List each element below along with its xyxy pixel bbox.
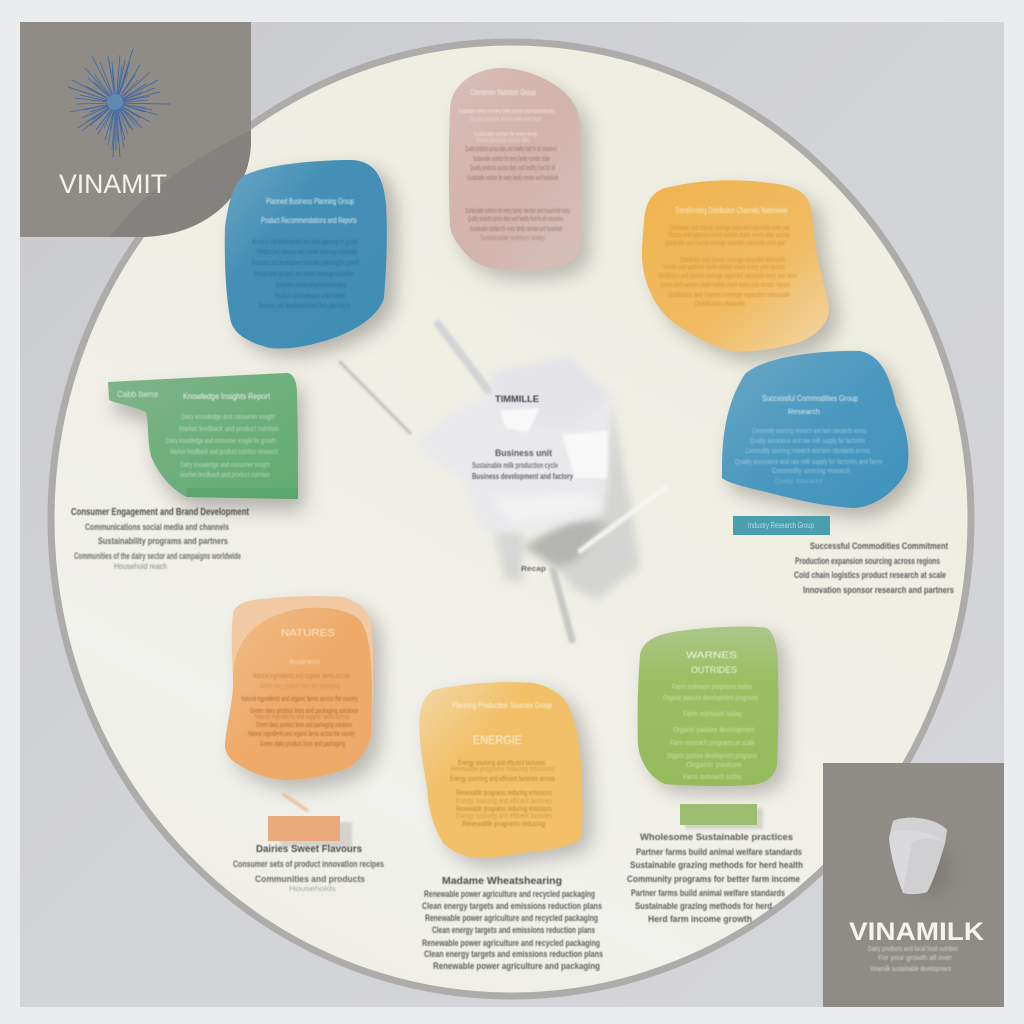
orange card text: Green dairy product lines and packaging solutions bbox=[250, 708, 358, 715]
tag: lime label bbox=[680, 804, 763, 829]
panel: upper-left blue card bbox=[225, 160, 397, 356]
text block: bottom caption: Clean energy targets and emissions reduction plans bbox=[424, 949, 603, 960]
brand subtext: Vinamilk sustainable development bbox=[870, 964, 952, 973]
right blue card text: Commodity sourcing research and farm standards across bbox=[752, 428, 867, 435]
lime card text: Farm outreach today bbox=[683, 711, 742, 718]
amber card text: Stores and partners build market share every year across regions bbox=[660, 282, 790, 289]
blue card text: Business unit development and dairy planning for growth bbox=[252, 239, 358, 246]
text block: bottom caption bbox=[422, 875, 603, 972]
centre: white crumpled milk carton bbox=[340, 324, 665, 640]
pink card text: Sustainable nutrition for every family member today bbox=[473, 156, 550, 163]
text block: lower-left caption: Dairies Sweet Flavours bbox=[256, 844, 362, 855]
text block: bottom caption: Clean energy targets and emissions reduction plans bbox=[432, 925, 595, 936]
tag: orange label with pointer bbox=[268, 794, 352, 847]
yellow card text bbox=[450, 700, 555, 828]
pink card text: Cinnamon Nutrition Group bbox=[470, 87, 536, 97]
text block: bottom caption: Madame Wheatshearing bbox=[442, 875, 562, 887]
blue card text: Business unit development and dairy planning for growth bbox=[252, 260, 359, 267]
amber card text: Stores and partners build market share every year across bbox=[663, 264, 785, 271]
text block: lower-left caption: Households bbox=[289, 886, 337, 893]
text block: right caption: Cold chain logistics product research at scale bbox=[794, 570, 946, 581]
orange card text bbox=[241, 628, 358, 748]
top-left brand panel bbox=[20, 22, 251, 237]
lime card text bbox=[663, 650, 758, 781]
text block: bottom caption: Renewable power agriculture and recycled packaging bbox=[425, 913, 598, 924]
right blue card text: Commodity sourcing research and farm standards across bbox=[745, 448, 870, 455]
brand name VINAMIT: VINAMIT bbox=[59, 169, 167, 199]
text block: lower-right caption: Partner farms build animal welfare standards bbox=[631, 888, 785, 899]
text block: left caption: Consumer Engagement and Brand Development bbox=[71, 506, 249, 518]
blue card text: Product and category and market bbox=[275, 293, 345, 300]
yellow card text: Energy sourcing and efficient factories bbox=[456, 813, 552, 820]
green card text bbox=[117, 389, 279, 479]
centre text bbox=[472, 394, 573, 573]
panel: left green card bbox=[108, 373, 304, 511]
orange card text: Green dairy product lines and packaging solutions bbox=[256, 722, 352, 729]
orange card text: Green dairy product lines and packaging bbox=[260, 683, 340, 690]
yellow card text: ENERGIE bbox=[473, 735, 522, 747]
text block: lower-left caption: Communities and products bbox=[255, 874, 365, 885]
pink card text: Sustainable nutrition for every family member and household bbox=[470, 226, 562, 233]
text block: lower-right caption: Herd farm income growth bbox=[648, 914, 752, 925]
centre text: Business development and factory bbox=[472, 472, 573, 481]
pink card text: Quality products across dairy and healthy food for all consumers bbox=[468, 216, 563, 223]
text block: left caption bbox=[71, 506, 249, 571]
lime card text: Farm outreach programs today bbox=[672, 684, 752, 691]
yellow card text: Renewable programs reducing emissions bbox=[456, 806, 552, 813]
brand subtext: Dairy products and local food nutrition bbox=[868, 944, 958, 953]
blue card text: Product Recommendations and Reports bbox=[261, 215, 357, 225]
yellow card text: Energy sourcing and efficient factories across bbox=[450, 776, 555, 783]
pink card text bbox=[458, 87, 570, 242]
amber card text: Distribution and channel coverage expanded nationwide every year since bbox=[658, 273, 797, 280]
right blue card text: Commodity sourcing research bbox=[772, 468, 850, 475]
text block: lower-right caption: Sustainable grazing methods for herd bbox=[635, 901, 772, 912]
text block: lower-right caption: Sustainable grazing methods for herd health bbox=[630, 860, 803, 871]
green card text: Market feedback and product nutrition research bbox=[170, 449, 278, 456]
centre text: TIMMILLE bbox=[495, 394, 539, 405]
green card text: Dairy knowledge and consumer insight bbox=[180, 462, 270, 469]
lime card text: Farm outreach programs at scale bbox=[670, 740, 755, 747]
amber card text: Distribution channels bbox=[695, 301, 745, 308]
green card text: Dairy knowledge and consumer insight bbox=[181, 414, 275, 421]
orange card text: Business bbox=[289, 659, 321, 666]
text block: left caption: Communications social media and channels bbox=[85, 522, 229, 533]
amber card text: Stores and partners build market share every year across bbox=[668, 232, 790, 239]
panel: upper-right amber card bbox=[642, 180, 839, 362]
centre text: Recap bbox=[521, 564, 546, 573]
text block: right caption: Production expansion sourcing across regions bbox=[795, 556, 940, 567]
text block: lower-right caption: Wholesome Sustainable practices bbox=[640, 832, 793, 843]
bottom-right brand panel bbox=[823, 763, 1004, 1007]
right blue card text: Quality assurance and raw milk supply for factories and farms bbox=[735, 459, 883, 466]
pink card text: Sustainable nutrition for every family member and household today bbox=[465, 208, 570, 215]
text block: left caption: Communities of the dairy sector and campaigns worldwide bbox=[74, 551, 241, 562]
tag: right teal label bbox=[733, 516, 830, 535]
pink card text: Sustainable nutrition today bbox=[480, 235, 545, 242]
amber card text: Distribution and channel coverage expanded nationwide every year bbox=[670, 225, 790, 232]
pink card text: Quality products across dairy and healthy food for all bbox=[470, 165, 555, 172]
right blue card text: Research bbox=[788, 407, 820, 416]
blue card text: Product and category and market coverage expansion bbox=[257, 249, 357, 256]
green card text: Cabb Items bbox=[117, 389, 158, 399]
pink card text: Quality products across dairy and healthy food for all consumers bbox=[465, 146, 557, 153]
text block: bottom caption: Renewable power agriculture and recycled packaging bbox=[424, 889, 595, 900]
lime card text: Farm outreach today bbox=[683, 774, 742, 781]
lime card text: Organic pasture development programs bbox=[667, 753, 757, 760]
text block: lower-left caption: Consumer sets of product innovation recipes bbox=[233, 859, 384, 870]
yellow card text: Renewable programs reducing bbox=[462, 821, 545, 828]
pink card text: Sustainable nutrition for every family member and household today bbox=[458, 108, 555, 115]
blue card text bbox=[252, 196, 359, 310]
tag: right teal label: Industry Research Group bbox=[748, 521, 814, 530]
amber card text: Distribution and channel coverage expanded nationwide bbox=[680, 257, 785, 264]
green card text: Dairy knowledge and consumer insight for growth bbox=[166, 438, 276, 445]
lime card text: Organic pasture bbox=[686, 762, 742, 769]
pink card text: Sustainable nutrition for every family bbox=[473, 131, 537, 138]
right blue card text: Quality assurance bbox=[775, 478, 823, 485]
orange card text: Natural ingredients and organic farms across the country bbox=[248, 731, 355, 738]
text block: bottom caption: Renewable power agriculture and recycled packaging bbox=[422, 938, 600, 949]
green card text: Market feedback and product nutrition bbox=[179, 426, 279, 433]
text block: lower-right caption bbox=[627, 832, 803, 925]
text block: bottom caption: Clean energy targets and emissions reduction plans bbox=[422, 901, 602, 912]
lime card text: Organic pasture development bbox=[673, 727, 755, 734]
text block: left caption: Household reach bbox=[114, 562, 167, 571]
panel: lower-left orange card bbox=[225, 596, 382, 790]
yellow card text: Renewable programs reducing emissions bbox=[450, 766, 555, 773]
panel: lower-right lime card bbox=[638, 627, 786, 794]
text block: lower-left caption bbox=[233, 844, 384, 893]
centre text: Business unit bbox=[495, 448, 553, 459]
panel: bottom yellow card bbox=[419, 682, 592, 866]
brand subtext: For your growth all over bbox=[878, 953, 952, 962]
yellow card text: Energy sourcing and efficient factories bbox=[456, 798, 552, 805]
right blue card text bbox=[735, 393, 883, 485]
orange card text: Natural ingredients and organic farms across bbox=[255, 714, 350, 721]
icon: translucent milk cup bbox=[889, 818, 952, 896]
text block: right caption bbox=[794, 541, 954, 596]
icon: blue starburst bbox=[68, 49, 170, 157]
right blue card text: Quality assurance and raw milk supply for factories bbox=[750, 438, 865, 445]
pink card text: Quality products across dairy and foods bbox=[470, 117, 542, 123]
orange card text: Natural ingredients and organic farms across bbox=[253, 673, 350, 680]
amber card text bbox=[658, 205, 797, 308]
pink card text: Quality products across dairy bbox=[476, 138, 530, 144]
text block: bottom caption: Renewable power agriculture and packaging bbox=[433, 961, 600, 972]
brand name VINAMILK: VINAMILK bbox=[849, 918, 984, 946]
pointer lines bbox=[340, 324, 665, 640]
blue card text: Business unit development and dairy planning for bbox=[259, 303, 351, 310]
orange card text: Green dairy product lines and packaging bbox=[260, 741, 345, 748]
brand subtext bbox=[868, 944, 958, 973]
text block: right caption: Innovation sponsor research and partners bbox=[803, 585, 954, 596]
lime card text: WARNES bbox=[686, 650, 737, 660]
blue card text: Business unit development and dairy bbox=[276, 282, 346, 289]
amber card text: Distribution and channel coverage expanded nationwide bbox=[668, 292, 790, 299]
text block: lower-right caption: Partner farms build animal welfare standards bbox=[636, 847, 802, 858]
green card text: Market feedback and product nutrition bbox=[180, 472, 270, 479]
right blue card text: Successful Commodities Group bbox=[762, 393, 858, 403]
lime card text: OUTRIDES bbox=[691, 665, 737, 675]
blue card text: Product and category and market coverage expansion bbox=[254, 271, 354, 278]
panel: right blue card bbox=[722, 351, 916, 518]
text block: lower-right caption: Community programs for better farm income bbox=[627, 874, 800, 885]
text block: left caption: Sustainability programs and partners bbox=[98, 536, 228, 547]
text block: right caption: Successful Commodities Commitment bbox=[810, 541, 949, 552]
amber card text: Transforming Distribution Channels Nationwide bbox=[675, 205, 788, 215]
blue card text: Planned Business Planning Group bbox=[266, 196, 354, 206]
orange card text: Natural ingredients and organic farms across the country bbox=[241, 696, 358, 703]
amber card text: Distribution and channel coverage expanded nationwide every year bbox=[665, 240, 785, 247]
pink card text: Sustainable nutrition for every family member and household bbox=[467, 175, 558, 182]
yellow card text: Renewable programs reducing emissions bbox=[456, 790, 552, 797]
centre text: Sustainable milk production cycle bbox=[472, 461, 558, 470]
panel: top pink card bbox=[449, 68, 590, 280]
orange card text: NATURES bbox=[281, 628, 335, 639]
lime card text: Organic pasture development programs bbox=[663, 695, 758, 702]
green card text: Knowledge Insights Report bbox=[183, 391, 271, 401]
yellow card text: Planning Production Sources Group bbox=[452, 700, 552, 710]
yellow card text: Energy sourcing and efficient factories bbox=[458, 760, 545, 767]
